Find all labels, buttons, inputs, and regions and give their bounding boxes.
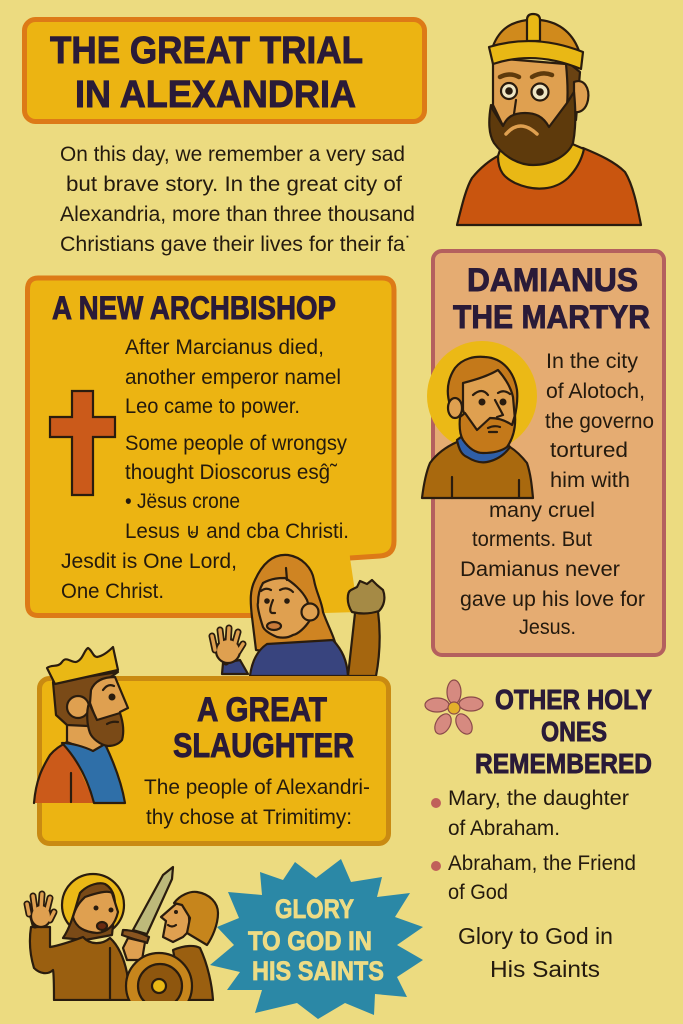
intro text: but brave story. In the great city of (66, 173, 402, 196)
archbishop body text: Jesdit is One Lord, (61, 550, 237, 573)
damianus body text: many cruel (489, 499, 595, 522)
panel: a new archbishop (28, 278, 394, 616)
heading: other holy ones: OTHER HOLY (495, 684, 652, 715)
archbishop body text: Leo came to power. (125, 395, 300, 418)
archbishop body text: • Jësus crone (125, 490, 240, 513)
damianus body text: tortured (550, 439, 628, 462)
damianus body text: Damianus never (460, 558, 620, 581)
title (50, 30, 363, 116)
list: holy ones: of God (448, 881, 508, 904)
list: holy ones: Abraham, the Friend (448, 852, 636, 875)
archbishop body text: One Christ. (61, 580, 164, 603)
archbishop body text: Lesus ⊌ and cba Christi. (125, 520, 349, 543)
damianus body text: In the city (546, 350, 638, 373)
archbishop body text: thought Dioscorus esĝ˜ (125, 461, 338, 484)
starburst text: GLORY (275, 894, 354, 924)
icon: cross (50, 391, 115, 495)
icon: woman with raised hands (212, 555, 384, 676)
heading: a great slaughter: SLAUGHTER (173, 727, 354, 765)
intro text: Alexandria, more than three thousand (60, 203, 415, 226)
starburst: glory to god (210, 859, 423, 1019)
icon: damianus with halo (422, 341, 537, 498)
icon: saint facing soldier (27, 867, 218, 1024)
damianus body text: torments. But (472, 528, 592, 551)
damianus body text: of Alotoch, (546, 380, 645, 403)
heading: a great slaughter (173, 691, 354, 765)
panel: damianus the martyr (433, 251, 664, 655)
heading: damianus the martyr: THE MARTYR (453, 299, 650, 335)
slaughter body text: The people of Alexandri- (144, 776, 370, 799)
damianus body text: Jesus. (519, 616, 576, 639)
starburst text: HIS SAINTS (252, 956, 384, 986)
heading: a great slaughter: A GREAT (197, 691, 327, 729)
closing text: Glory to God in (458, 923, 613, 949)
heading: other holy ones (475, 684, 652, 779)
title panel (24, 20, 424, 122)
panel: other holy ones remembered (425, 680, 652, 982)
closing text (458, 923, 613, 982)
title: THE GREAT TRIAL (50, 30, 363, 72)
slaughter body text: thy chose at Trimitimy: (146, 806, 352, 829)
closing text: His Saints (490, 956, 600, 982)
panel: a great slaughter (40, 678, 388, 844)
list: holy ones: Mary, the daughter (448, 787, 629, 810)
heading: damianus the martyr (453, 262, 650, 335)
icon: emperor portrait (457, 14, 641, 225)
list: holy ones (431, 787, 636, 904)
starburst text: TO GOD IN (248, 926, 372, 956)
archbishop body text: Some people of wrongsy (125, 432, 347, 455)
slaughter body text (144, 776, 370, 829)
damianus body text: him with (550, 469, 630, 492)
damianus body text: gave up his love for (460, 588, 645, 611)
damianus body text (460, 350, 654, 639)
intro text (60, 143, 415, 256)
heading: damianus the martyr: DAMIANUS (467, 262, 638, 298)
intro text: On this day, we remember a very sad (60, 143, 405, 166)
damianus body text: the governo (545, 410, 654, 433)
heading: other holy ones: REMEMBERED (475, 748, 652, 779)
archbishop body text: After Marcianus died, (125, 336, 324, 359)
icon: crowned king (34, 647, 128, 803)
intro text: Christians gave their lives for their fa˙ (60, 233, 412, 256)
icon: flower (425, 680, 483, 737)
list: holy ones: of Abraham. (448, 817, 560, 840)
archbishop body text: another emperor namel (125, 366, 341, 389)
archbishop body text (61, 336, 349, 603)
heading: other holy ones: ONES (541, 716, 607, 747)
heading: a new archbishop: A NEW ARCHBISHOP (52, 290, 336, 326)
title: IN ALEXANDRIA (75, 74, 356, 116)
starburst text (248, 894, 384, 986)
